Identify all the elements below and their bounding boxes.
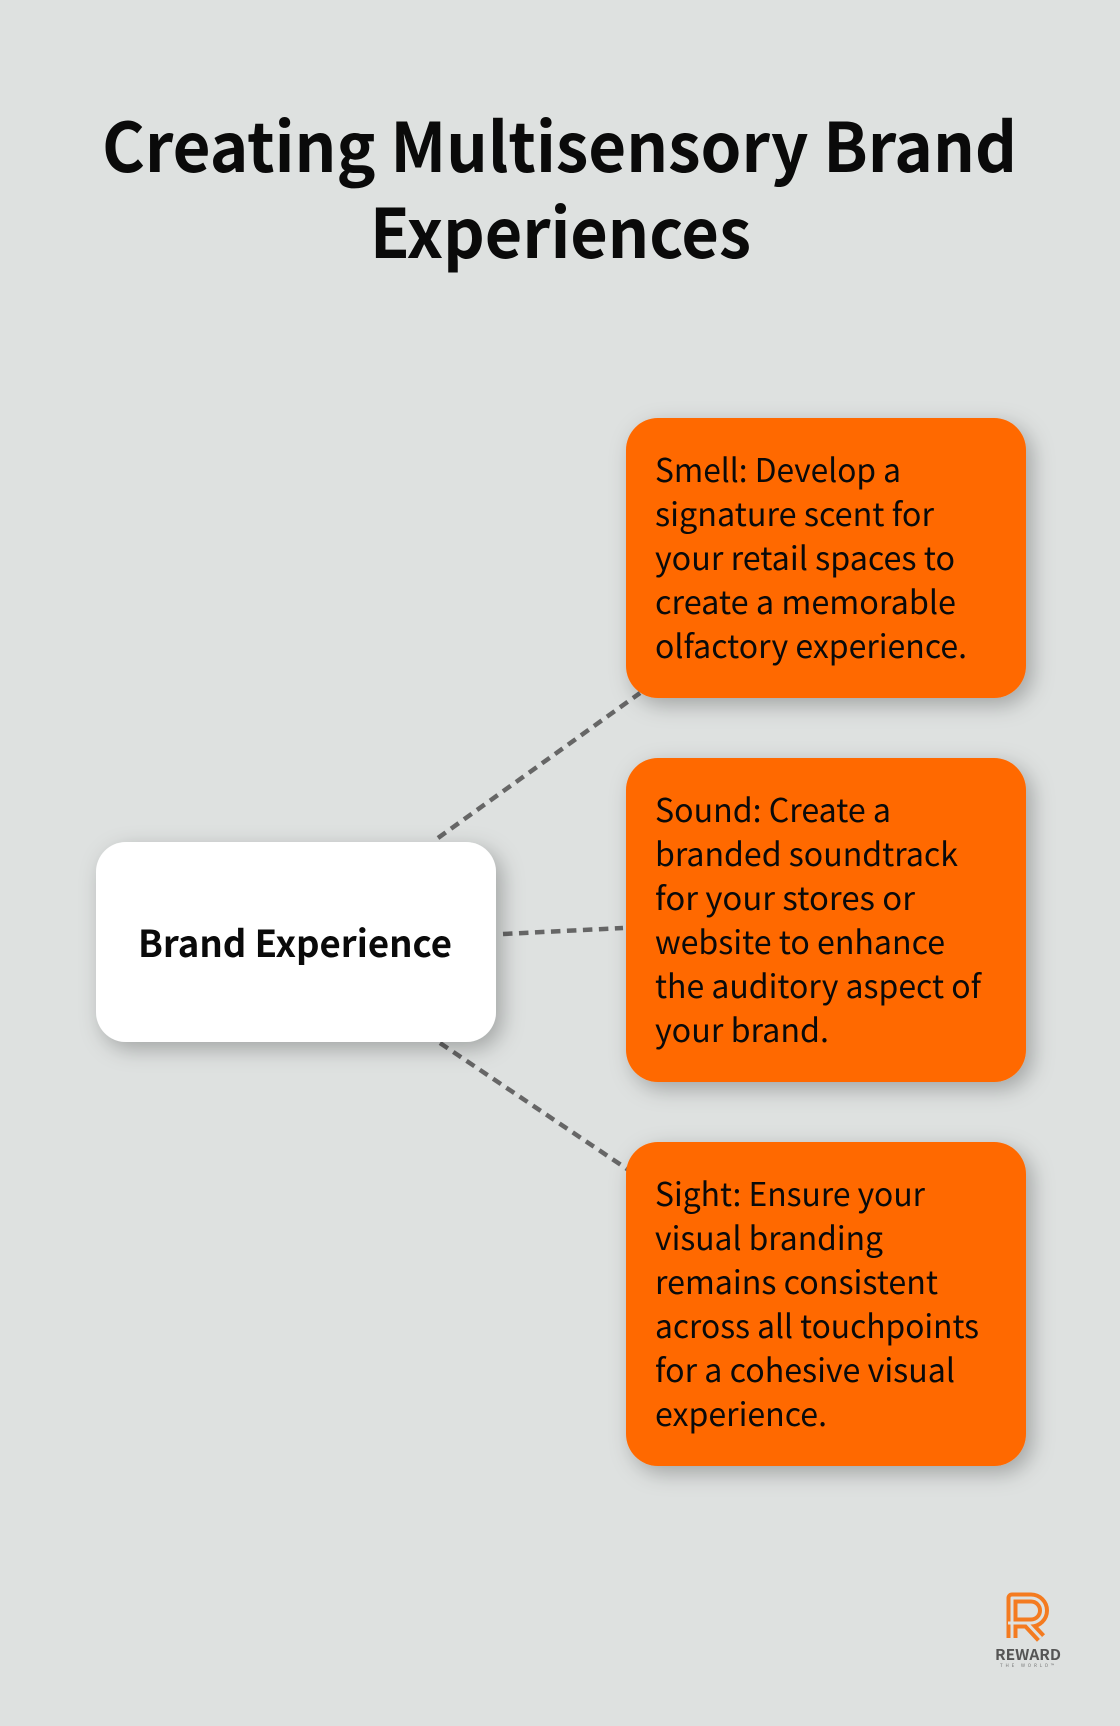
logo: reward the world: REWARD: [995, 1644, 1061, 1665]
panel: sight: visual branding: [655, 1213, 883, 1260]
logo: reward the world: [995, 1598, 1061, 1669]
panel: smell: olfactory experience.: [655, 621, 967, 668]
panel: brand experience: [96, 842, 496, 1042]
panel: sight: experience.: [655, 1389, 827, 1436]
title: Creating Multisensory Brand: [102, 93, 1017, 192]
panel: smell: your retail spaces to: [655, 533, 955, 580]
panel: sound: your brand.: [655, 1005, 829, 1052]
panel: sound: for your stores or: [655, 873, 915, 920]
title: Experiences: [370, 179, 751, 278]
panel: sound: [626, 758, 1026, 1082]
panel: sound: website to enhance: [655, 917, 945, 964]
logo: reward the world: THE WORLD™: [1000, 1663, 1055, 1669]
panel: smell: signature scent for: [655, 489, 934, 536]
connector: brand experience to sight: [440, 1043, 630, 1171]
panel: sound: Sound: Create a: [655, 785, 891, 832]
panel: smell: [626, 418, 1026, 698]
connector: brand experience to sound: [503, 928, 623, 934]
panel: brand experience: Brand Experience: [138, 914, 452, 968]
panel: sight: for a cohesive visual: [655, 1345, 955, 1392]
panel: sight: across all touchpoints: [655, 1301, 979, 1348]
panel: smell: Smell: Develop a: [655, 445, 901, 492]
connector: brand experience to smell: [438, 693, 640, 838]
panel: sound: branded soundtrack: [655, 829, 958, 876]
panel: smell: create a memorable: [655, 577, 956, 624]
panel: sight: Sight: Ensure your: [655, 1169, 925, 1216]
title: [102, 93, 1017, 278]
icon: R mark: [1008, 1598, 1044, 1638]
panel: sight: [626, 1142, 1026, 1466]
panel: sight: remains consistent: [655, 1257, 938, 1304]
panel: sound: the auditory aspect of: [655, 961, 982, 1008]
